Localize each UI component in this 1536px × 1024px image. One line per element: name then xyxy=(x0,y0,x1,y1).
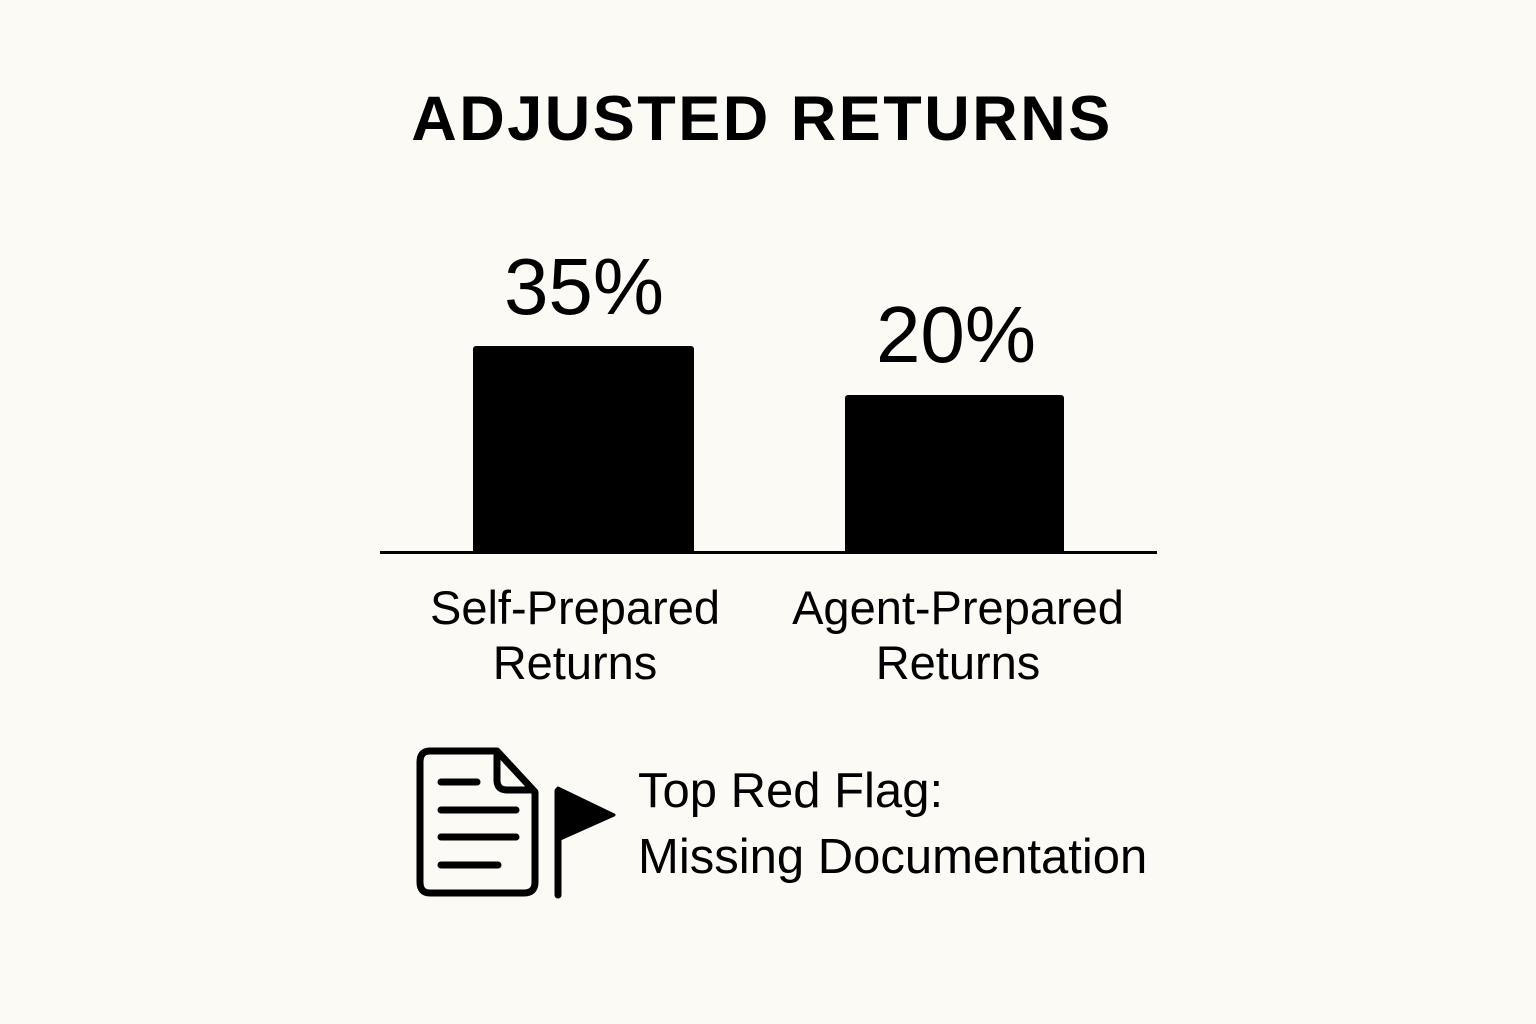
category label: agent-prepared: Returns xyxy=(876,636,1040,689)
bar chart xyxy=(380,242,1157,689)
axis line xyxy=(380,551,1157,554)
value label: 20%: 20% xyxy=(876,290,1036,379)
category label: self-prepared: Returns xyxy=(493,636,657,689)
callout text: Top Red Flag: xyxy=(638,764,943,818)
bar: agent-prepared xyxy=(845,395,1064,552)
callout text: Missing Documentation xyxy=(638,830,1147,884)
icon: document with flag xyxy=(416,748,616,898)
category label: agent-prepared xyxy=(792,581,1124,689)
callout text xyxy=(638,764,1147,884)
category label: self-prepared xyxy=(430,581,720,689)
category label: self-prepared: Self-Prepared xyxy=(430,581,720,634)
category label: agent-prepared: Agent-Prepared xyxy=(792,581,1124,634)
value label: 35%: 35% xyxy=(504,242,664,331)
bar: self-prepared xyxy=(473,346,694,552)
title: ADJUSTED RETURNS xyxy=(411,84,1113,154)
